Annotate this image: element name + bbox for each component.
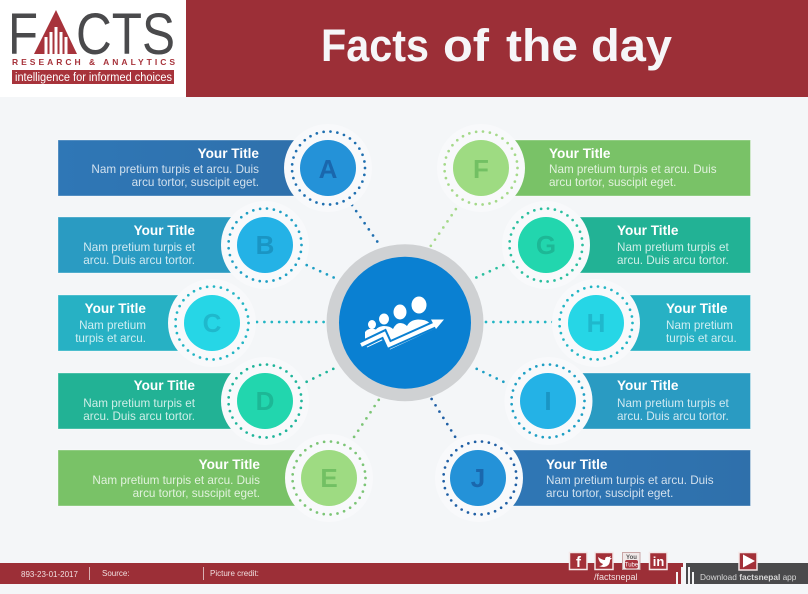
panel H: H <box>587 308 605 338</box>
app download bar <box>676 552 808 584</box>
panel I: Nam pretium turpis et <box>617 397 729 410</box>
panel B: Nam pretium turpis et <box>83 241 196 254</box>
logo <box>0 0 186 97</box>
title: of <box>443 20 490 71</box>
logo: RESEARCH & ANALYTICS <box>12 57 175 67</box>
panel G: arcu. Duis arcu tortor. <box>617 254 729 267</box>
panel J <box>435 434 750 522</box>
panel H: Your Title <box>666 301 728 316</box>
panel F: arcu tortor, suscipit eget. <box>549 176 676 189</box>
logo: intelligence for informed choices <box>15 72 172 84</box>
panel F: Your Title <box>549 146 611 161</box>
footer source: Source: <box>102 569 130 578</box>
panel E <box>58 434 373 522</box>
title: day <box>591 20 672 71</box>
icon: facebook: f <box>576 554 582 571</box>
central hub <box>326 244 484 401</box>
panel A: Nam pretium turpis et arcu. Duis <box>91 163 259 176</box>
panel H: Nam pretium <box>666 319 733 332</box>
footer picture credit: Picture credit: <box>210 569 259 578</box>
panel E: E <box>320 463 338 493</box>
panel J: Your Title <box>546 457 608 472</box>
icon: linkedin <box>650 552 667 570</box>
icon: youtube <box>622 552 640 570</box>
panel E: Your Title <box>199 457 260 472</box>
title: the <box>506 20 578 71</box>
panel J: arcu tortor, suscipit eget. <box>546 487 673 500</box>
panel B: arcu. Duis arcu tortor. <box>83 254 195 267</box>
logo: F <box>8 2 38 67</box>
panel I: I <box>544 386 552 416</box>
panel F: Nam pretium turpis et arcu. Duis <box>549 163 717 176</box>
panel B <box>58 201 309 289</box>
panel J: Nam pretium turpis et arcu. Duis <box>546 474 714 487</box>
panel H <box>552 279 750 367</box>
panel A: Your Title <box>198 146 259 161</box>
icon: team with rising arrow <box>361 296 444 350</box>
panel E: Nam pretium turpis et arcu. Duis <box>92 474 260 487</box>
icon: youtube: You <box>626 555 637 561</box>
panel I: Your Title <box>617 378 679 393</box>
panel A: arcu tortor, suscipit eget. <box>132 176 259 189</box>
panel D <box>58 357 309 445</box>
panel B: Your Title <box>134 223 195 238</box>
icon: facebook <box>570 552 587 571</box>
footer bar <box>0 563 683 584</box>
panel C: Nam pretium <box>79 319 146 332</box>
connector lines <box>257 203 555 443</box>
panel G: Your Title <box>617 223 679 238</box>
panel D: arcu. Duis arcu tortor. <box>83 410 195 423</box>
title: Facts <box>321 20 429 71</box>
panel F: F <box>473 154 489 184</box>
panel A: A <box>319 154 338 184</box>
panel B: B <box>256 230 274 260</box>
logo: CTS <box>76 2 175 67</box>
panel D: D <box>256 386 274 416</box>
footer date: 893-23-01-2017 <box>21 570 78 579</box>
panel G: G <box>536 230 556 260</box>
panel F <box>437 124 750 212</box>
title <box>321 20 672 71</box>
panel H: turpis et arcu. <box>666 332 737 345</box>
panel J: J <box>471 463 485 493</box>
panel E: arcu tortor, suscipit eget. <box>133 487 260 500</box>
panel I <box>504 357 750 445</box>
icon: twitter <box>595 552 613 570</box>
icon: linkedin: in <box>653 554 664 569</box>
panel C: Your Title <box>85 301 146 316</box>
header banner <box>186 0 808 97</box>
panel D: Nam pretium turpis et <box>83 397 196 410</box>
panel A <box>58 124 372 212</box>
handle: /factsnepal <box>594 572 638 582</box>
panel C: turpis et arcu. <box>75 332 146 345</box>
icon: youtube: Tube <box>625 562 639 568</box>
panel C <box>58 279 256 367</box>
panel D: Your Title <box>134 378 195 393</box>
panel C: C <box>203 308 222 338</box>
panel G: Nam pretium turpis et <box>617 241 729 254</box>
panel I: arcu. Duis arcu tortor. <box>617 410 729 423</box>
panel G <box>502 201 750 289</box>
icon: play <box>739 552 757 570</box>
app download bar: Download factsnepal app <box>700 572 797 582</box>
